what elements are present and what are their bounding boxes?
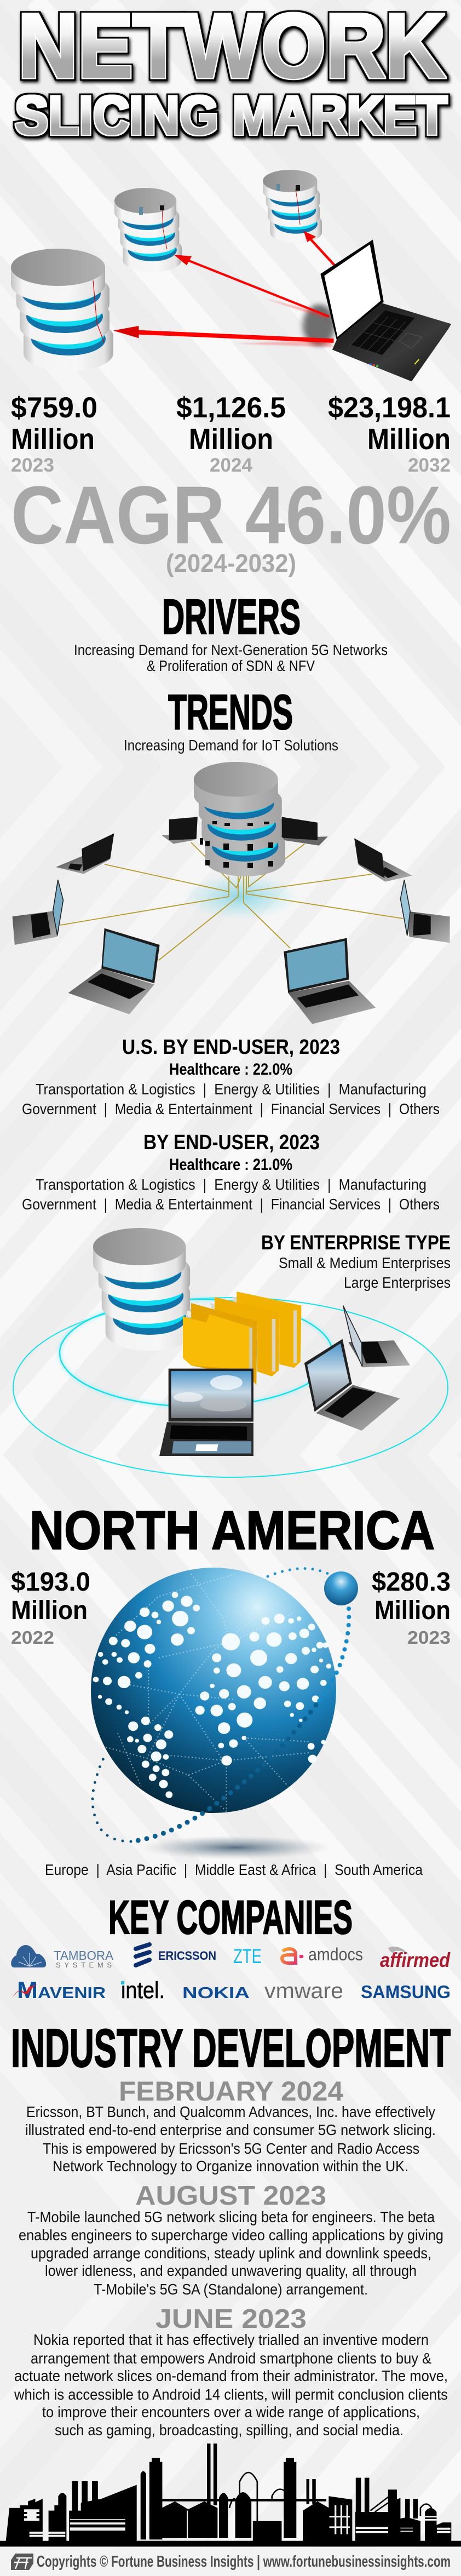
stat: 2023 value: [11, 392, 97, 476]
by enterprise type: [261, 1231, 451, 1291]
laptop and arrows: [113, 231, 451, 381]
logo: ZTE: ZTE: [233, 1945, 262, 1967]
industrial skyline: [0, 2443, 461, 2546]
stat: North America 2022: [11, 1568, 90, 1648]
segment: by end-user: BY END-USER, 2023: [143, 1131, 320, 1154]
icon: satellite sphere: [324, 1571, 358, 1605]
stat: North America 2023: Million: [374, 1596, 451, 1625]
stat: North America 2022: Million: [11, 1596, 88, 1625]
laptop: left upper: [56, 833, 114, 874]
icon: Fortune Business Insights logo: [11, 2554, 33, 2570]
development: February 2024: FEBRUARY 2024: [119, 2076, 343, 2107]
development: June 2023: [14, 2304, 448, 2439]
icon: medium server: [114, 188, 182, 272]
CAGR: (2024-2032): [166, 549, 296, 577]
city light dots: [93, 1592, 331, 1798]
segment: by end-user: Healthcare : 21.0%: [169, 1156, 292, 1174]
trends: TRENDS: [168, 685, 293, 740]
stat: 2023 value: $759.0: [11, 392, 97, 424]
trends: [124, 685, 338, 754]
stat: North America 2022: $193.0: [11, 1568, 90, 1597]
logo: Ericsson: [136, 1944, 216, 1965]
stat: North America 2023: $280.3: [372, 1568, 451, 1597]
arrow: to large server: [113, 326, 333, 343]
connection lines: [60, 842, 403, 960]
stat: North America 2022: 2022: [11, 1627, 54, 1648]
laptop: back right: [281, 817, 328, 846]
stat: 2032 value: [328, 392, 451, 476]
development: February 2024: This is empowered by Ericsson's 5G Center and Radio Access: [43, 2140, 419, 2157]
laptop: back left: [162, 817, 198, 844]
logo: VMware: vmware: [264, 1979, 343, 2003]
globe illustration: [91, 1568, 358, 1860]
icon: central server: [194, 762, 285, 876]
trends: Increasing Demand for IoT Solutions: [124, 737, 338, 754]
logo: Nokia: NOKIA: [182, 1984, 250, 2002]
development: June 2023: to improve their encounters over a wide range of applications,: [42, 2403, 420, 2420]
development: August 2023: T-Mobile's 5G SA (Standalone) arrangement.: [94, 2281, 368, 2298]
arrow: to medium server: [174, 255, 329, 317]
logo: Tambora Systems: [11, 1945, 114, 1969]
laptop: back: [343, 1305, 410, 1367]
development: February 2024: Network Technology to Organize innovation within the UK.: [53, 2158, 408, 2175]
logo: Affirmed: affirmed: [380, 1949, 451, 1971]
logo: Mavenir: M: [17, 1977, 38, 2004]
icon: enterprise server: [93, 1228, 194, 1351]
network lines on globe: [106, 1574, 309, 1811]
logo: Tambora Systems: TAMBORA: [54, 1948, 114, 1963]
segment: U.S. by end-user: [22, 1036, 440, 1117]
hero illustration: servers, arrows and laptop: [11, 170, 451, 381]
logo: Amdocs: amdocs: [308, 1944, 363, 1964]
drivers: DRIVERS: [162, 590, 301, 645]
orbit dots: [93, 1569, 349, 1841]
laptop: far right: [400, 880, 450, 943]
development: June 2023: Nokia reported that it has effectively trialled an inventive modern: [33, 2331, 429, 2348]
stat: 2032 value: Million: [367, 423, 451, 456]
segment: U.S. by end-user: Healthcare : 22.0%: [169, 1060, 292, 1078]
stat: 2024 value: $1,126.5: [176, 392, 286, 424]
arrow: to small server: [304, 231, 335, 265]
title: [15, 0, 447, 146]
development: June 2023: such as gaming, broadcasting, spilling, and social media.: [55, 2422, 404, 2439]
stat: 2023 value: 2023: [11, 455, 54, 476]
logo: Intel: intel.: [121, 1977, 165, 2004]
laptop: far left: [13, 880, 63, 945]
laptop: right upper: [354, 838, 412, 882]
drivers: Increasing Demand for Next-Generation 5G Networks: [74, 641, 388, 658]
development: June 2023: arrangement that empowers Android smartphone clients to buy &: [31, 2350, 431, 2367]
logo: Tambora Systems: SYSTEMS: [56, 1961, 112, 1969]
development: June 2023: JUNE 2023: [155, 2304, 307, 2334]
logo: Amdocs: [282, 1944, 363, 1964]
segment: by end-user: [22, 1131, 440, 1213]
logo: Ericsson: ERICSSON: [158, 1949, 216, 1963]
drivers: [74, 590, 388, 674]
stat: North America 2023: 2023: [407, 1627, 451, 1648]
company logos: [11, 1944, 451, 2004]
stat: 2024 value: 2024: [210, 455, 253, 476]
icon: small server: [263, 170, 322, 243]
laptop: front: [159, 1369, 253, 1456]
laptop: right: [304, 1339, 400, 1431]
development: August 2023: lower idleness, and expanded unwavering quality, all through: [45, 2262, 417, 2279]
stat: North America 2023: [372, 1568, 451, 1648]
stat: 2032 value: 2032: [408, 455, 451, 476]
development: August 2023: AUGUST 2023: [135, 2181, 326, 2211]
laptop: front left: [68, 928, 160, 1014]
development: February 2024: [25, 2076, 436, 2175]
stat: 2032 value: $23,198.1: [328, 392, 451, 424]
orbit rings: [13, 1298, 448, 1477]
enterprise illustration: orbits, server, folders and laptops: [13, 1228, 448, 1477]
logo: Samsung: SAMSUNG: [361, 1982, 451, 2002]
other regions: Europe | Asia Pacific | Middle East & Africa | South America: [45, 1861, 423, 1878]
segment: U.S. by end-user: U.S. BY END-USER, 2023: [122, 1036, 340, 1059]
segment: by end-user: Transportation & Logistics | Energy & Utilities | Manufacturing: [36, 1176, 427, 1193]
logo: Mavenir: [12, 1977, 106, 2004]
logo: Mavenir: AVENIR: [38, 1984, 106, 2002]
stat: 2024 value: [176, 392, 286, 476]
icon: folders: [183, 1292, 301, 1385]
stat: 2023 value: Million: [11, 423, 95, 456]
stat: 2024 value: Million: [189, 423, 273, 456]
icon: large server: [11, 249, 113, 371]
network illustration: central server with laptops: [13, 762, 450, 1024]
laptop: front right: [284, 938, 376, 1024]
segment: U.S. by end-user: Transportation & Logistics | Energy & Utilities | Manufacturing: [36, 1081, 427, 1098]
development: August 2023: [19, 2181, 443, 2298]
drivers: & Proliferation of SDN & NFV: [147, 657, 315, 674]
footer band: [0, 2547, 461, 2576]
